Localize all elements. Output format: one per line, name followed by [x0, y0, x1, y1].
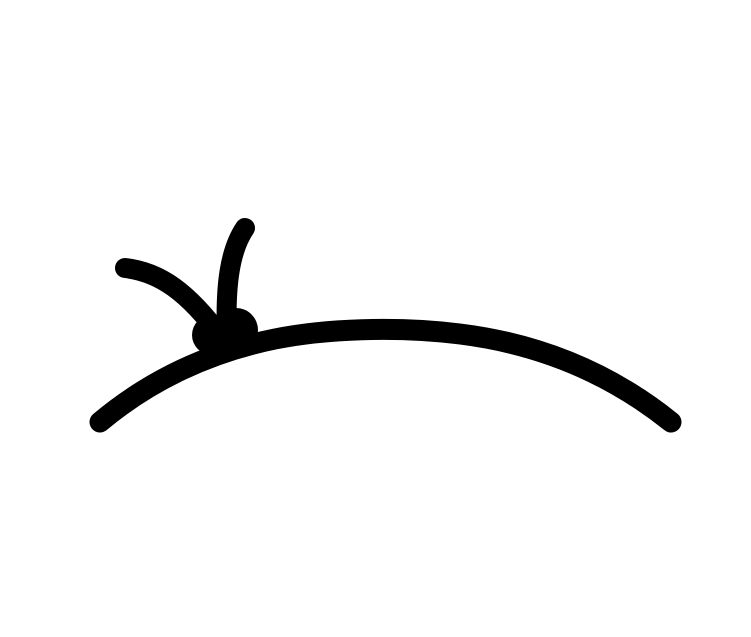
sprout base knot — [192, 308, 258, 355]
right leaf stem — [227, 228, 245, 335]
main arc — [100, 329, 671, 422]
left leaf stem — [125, 268, 222, 338]
